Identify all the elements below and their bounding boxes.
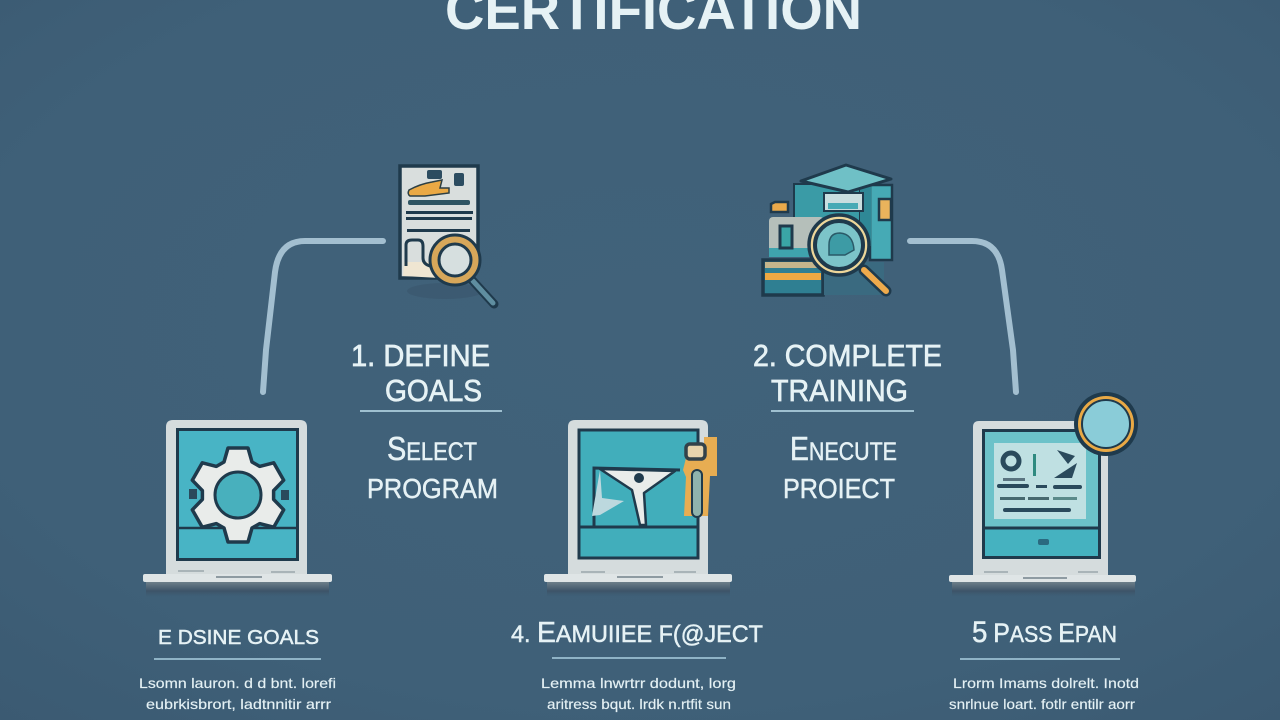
arrow: left connector bbox=[263, 241, 383, 392]
panel: step 2 heading: 2. COMPLETE bbox=[753, 338, 942, 373]
panel: bottom step 4 caption: 4. EAMUIIEE F(@JECT bbox=[511, 617, 763, 649]
arrow: right connector bbox=[910, 241, 1016, 392]
panel: bottom step 1 caption: Lsomn lauron. d d bnt. lorefi bbox=[139, 675, 336, 691]
icon: laptop with gear bbox=[143, 420, 332, 597]
icon: document with magnifier bbox=[400, 166, 494, 304]
panel: bottom step 4 caption bbox=[511, 617, 763, 712]
panel: bottom step 5 caption: snrlnue loart. fotlr entilr aorr bbox=[949, 696, 1135, 712]
panel: bottom step 4 caption: aritress bqut. lrdk n.rtfit sun bbox=[547, 696, 731, 712]
text block: select program bbox=[367, 430, 498, 504]
panel: step 1 heading: 1. DEFINE bbox=[351, 338, 490, 373]
panel: bottom step 1 caption: eubrkisbrort, ladtnnitir arrr bbox=[146, 696, 331, 712]
text block: select program: SELECT bbox=[387, 430, 477, 467]
text block: select program: PROGRAM bbox=[367, 473, 498, 504]
panel: step 1 heading: GOALS bbox=[385, 373, 482, 408]
icon: laptop with project tool bbox=[544, 420, 732, 597]
text block: execute project bbox=[783, 430, 897, 504]
icon: laptop with exam certificate bbox=[949, 392, 1138, 597]
panel: bottom step 1 caption: E DSINE GOALS bbox=[158, 627, 319, 649]
panel: bottom step 1 caption bbox=[139, 627, 336, 712]
panel: bottom step 5 caption: Lrorm Imams dolrelt. Inotd bbox=[953, 675, 1139, 691]
panel: bottom step 4 caption: Lemma lnwrtrr dodunt, lorg bbox=[541, 675, 736, 691]
panel: step 2 heading: TRAINING bbox=[771, 373, 908, 408]
panel: step 1 heading bbox=[351, 338, 502, 412]
text block: execute project: ENECUTE bbox=[790, 430, 897, 467]
text block: execute project: PROIECT bbox=[783, 473, 895, 504]
icon: campus building with magnifier bbox=[763, 165, 892, 295]
panel: bottom step 5 caption bbox=[949, 616, 1139, 712]
panel: bottom step 5 caption: 5 PASS EPAN bbox=[972, 616, 1117, 649]
panel: step 2 heading bbox=[753, 338, 942, 412]
